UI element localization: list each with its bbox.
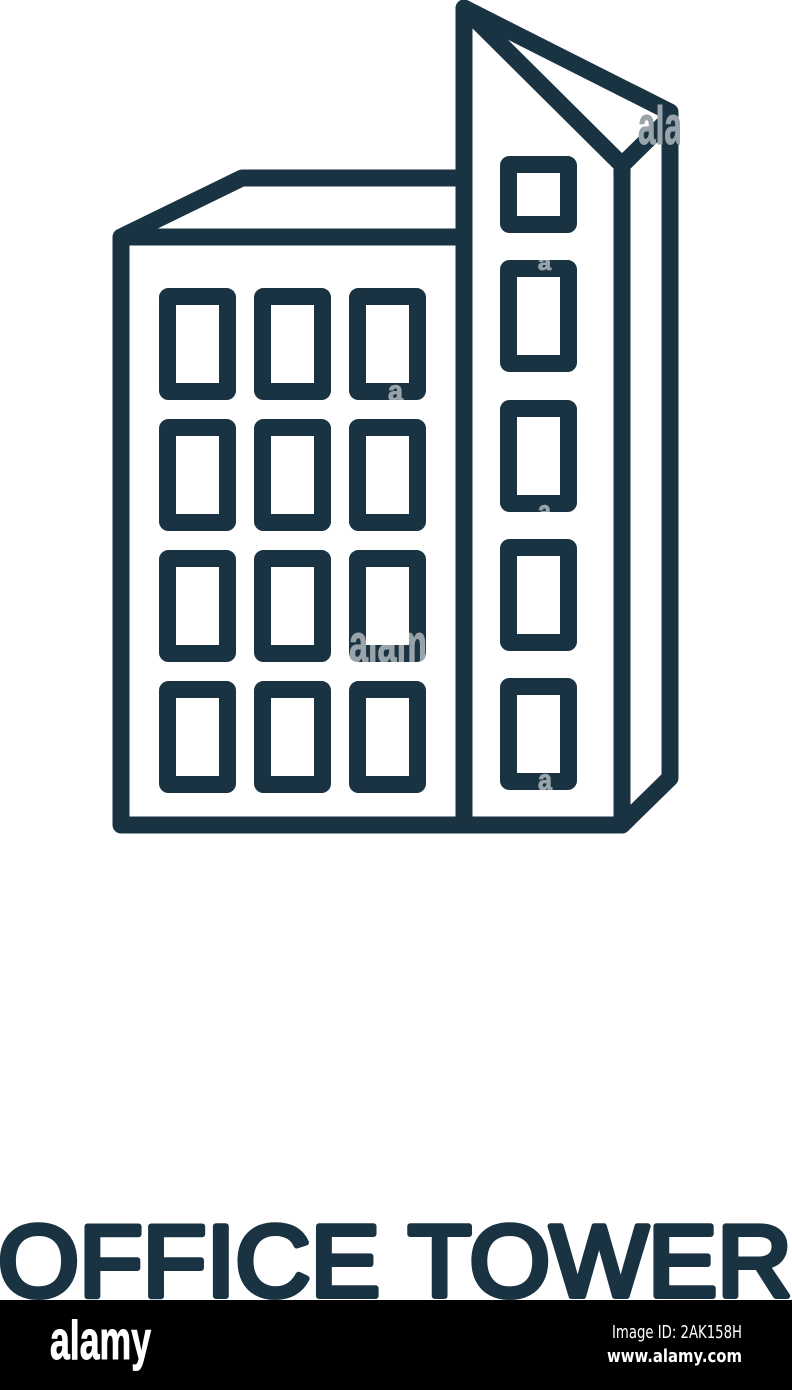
watermark: a on window: a	[388, 375, 403, 408]
title word: office: OFFICE	[0, 1206, 380, 1318]
tower outline with slanted roof	[464, 8, 670, 825]
watermark: ala at roof: ala	[638, 96, 683, 156]
window interior over watermark	[366, 567, 409, 645]
alamy logo: alamy	[50, 1309, 151, 1371]
low building windows	[168, 296, 418, 784]
icon: office tower	[121, 8, 670, 825]
watermark: a on tower window: a	[538, 250, 552, 275]
footer bar	[0, 1300, 792, 1390]
low building outline with roof	[121, 178, 622, 825]
image id: Image ID: 2AK158H	[612, 1322, 742, 1343]
watermark: a on tower window lower: a	[538, 495, 551, 528]
title	[0, 1222, 790, 1300]
title word: tower: TOWER	[408, 1206, 792, 1318]
website: www.alamy.com	[607, 1346, 742, 1367]
watermark fragments	[349, 96, 683, 797]
watermark: alam on window: alam	[349, 614, 427, 674]
watermark: a on bottom tower window: a	[538, 764, 552, 797]
tower windows	[508, 164, 568, 782]
